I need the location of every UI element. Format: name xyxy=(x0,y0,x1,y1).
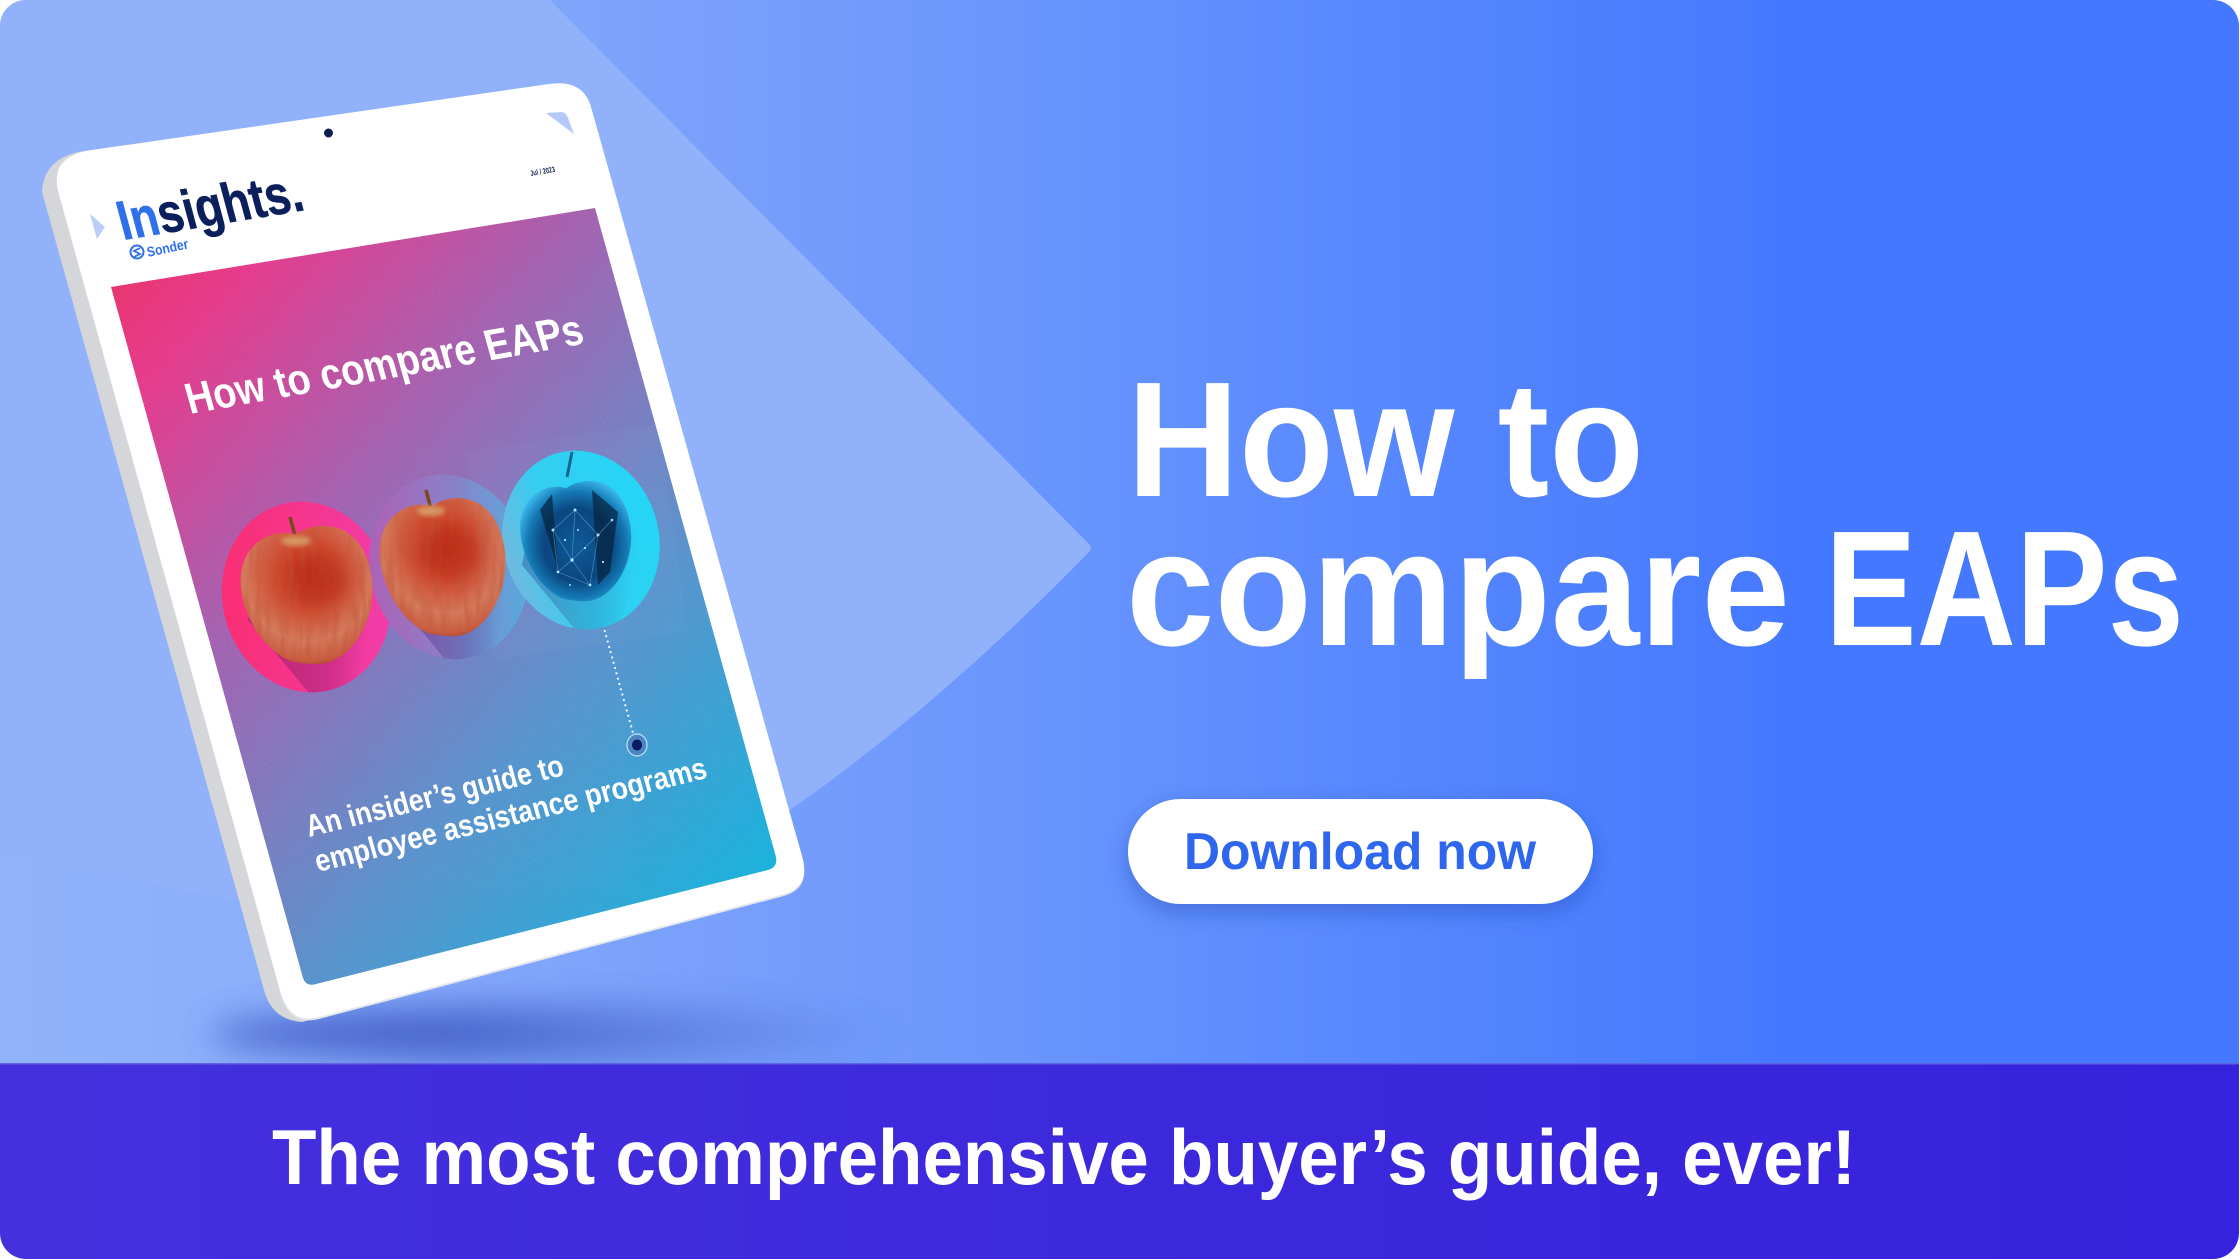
stem xyxy=(567,452,572,477)
stem xyxy=(290,517,297,543)
stem cavity xyxy=(417,506,445,516)
Sonder wordmark: Sonder xyxy=(145,235,190,260)
Sonder logo xyxy=(130,241,188,260)
heading line 1: How to xyxy=(1127,348,1644,531)
heading line 2 xyxy=(1126,497,2184,680)
apple circle: cyan xyxy=(484,434,678,650)
Sonder icon xyxy=(130,246,144,258)
banner top hairline xyxy=(0,1063,2240,1064)
cover subtitle xyxy=(301,748,711,879)
tablet ground shadow xyxy=(210,1006,910,1062)
connector end point xyxy=(627,734,647,756)
long shadow xyxy=(388,550,508,680)
button label: Download now xyxy=(1184,823,1537,881)
heading line 2: compare xyxy=(1126,497,1790,680)
tablet back rim xyxy=(57,186,804,1020)
tablet side edge xyxy=(42,150,330,1022)
digital blue apple xyxy=(507,452,646,615)
subtitle line 1: An insider’s guide to xyxy=(301,748,567,844)
dark facets xyxy=(540,490,618,585)
cover title: How to compare EAPs xyxy=(179,306,589,424)
red blush xyxy=(420,526,480,578)
fruit xyxy=(373,492,516,645)
long shadow xyxy=(248,580,372,712)
cover gradient xyxy=(111,208,776,985)
main heading xyxy=(1126,348,2184,680)
glow rim xyxy=(507,468,646,615)
background play-arrow shape xyxy=(0,0,1091,810)
corner marker xyxy=(546,112,574,134)
banner text: The most comprehensive buyer’s guide, ever! xyxy=(272,1113,1856,1201)
date label: Jul / 2023 xyxy=(529,165,557,178)
network nodes xyxy=(552,508,613,586)
button pill xyxy=(1128,799,1593,904)
subtitle line 2: employee assistance programs xyxy=(310,751,711,879)
stem cavity xyxy=(281,536,311,546)
long shadow xyxy=(522,525,638,650)
apple circle: purple-blue xyxy=(350,458,548,680)
stem xyxy=(426,490,432,513)
bottom banner xyxy=(0,1063,2240,1260)
network lines xyxy=(553,510,612,585)
paper texture xyxy=(90,190,810,1000)
tablet front face xyxy=(57,83,804,1018)
dotted connector xyxy=(604,630,633,733)
download button xyxy=(1128,799,1593,904)
red blush xyxy=(288,554,348,606)
banner strip xyxy=(0,1063,2240,1260)
tablet screen cover xyxy=(111,208,776,985)
red apple 2 xyxy=(373,490,516,645)
tablet xyxy=(42,83,810,1022)
apple body xyxy=(514,476,640,609)
apple circle: pink xyxy=(202,484,411,712)
fruit xyxy=(234,520,383,673)
page arrow marker xyxy=(90,214,105,239)
red apple 1 xyxy=(234,517,383,673)
camera dot xyxy=(324,128,333,138)
Insights logo: Insights. xyxy=(110,160,310,252)
